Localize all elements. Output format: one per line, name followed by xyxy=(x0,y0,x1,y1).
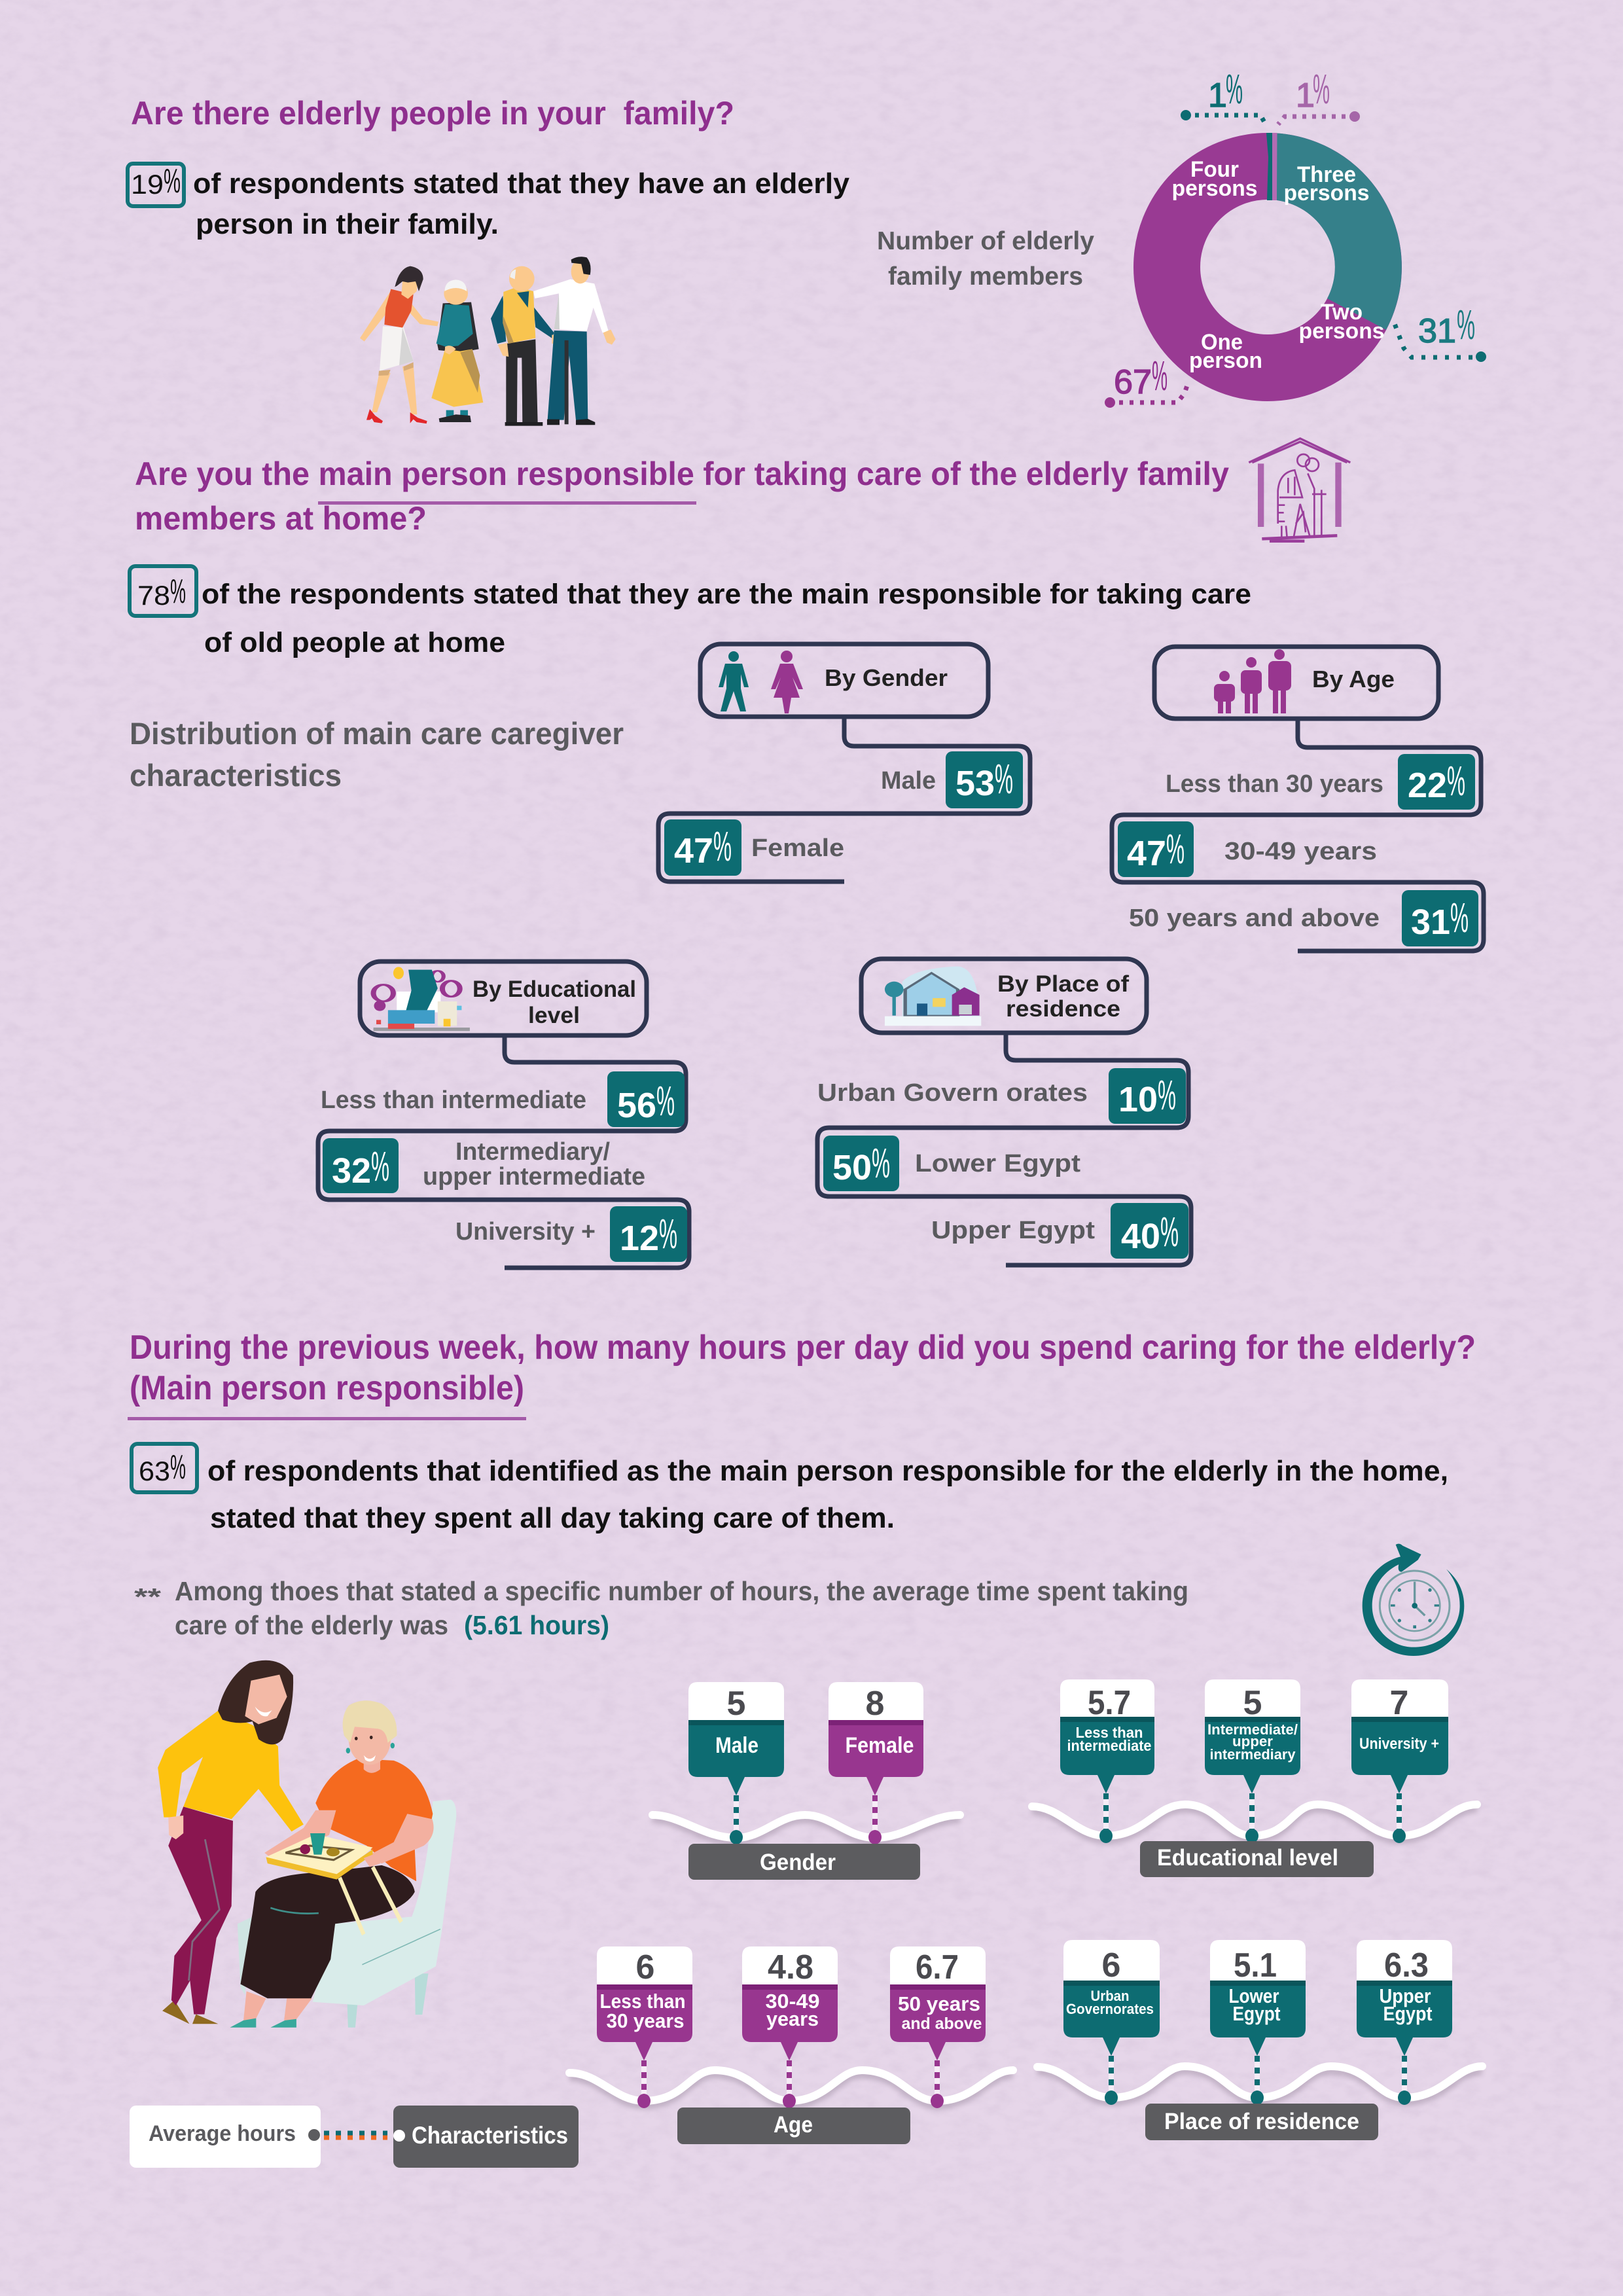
row: intermediary 32 percent: Intermediary/ xyxy=(455,1138,610,1166)
row: less than intermediate 56 percent: Less than intermediate xyxy=(321,1086,586,1114)
icon: education graphic xyxy=(374,967,470,1031)
stat: 63 percent badge: % xyxy=(170,1448,186,1486)
panel: by gender xyxy=(658,644,1030,882)
icon: male figure xyxy=(719,651,749,711)
card: intermediate 5: Intermediate/ xyxy=(1207,1721,1298,1738)
label: number of elderly family members xyxy=(877,227,1094,291)
row: male 53 percent xyxy=(881,751,1023,808)
wave line xyxy=(1032,1804,1477,1840)
connector: residence xyxy=(817,1033,1191,1265)
header box: by educational level: level xyxy=(528,1003,580,1028)
icon: female figure xyxy=(771,651,803,713)
card: less than intermediate 5.7 xyxy=(1060,1679,1154,1843)
heading: hours per day: During the previous week, how many hours per day did you spend caring for the elderly? xyxy=(130,1329,1476,1367)
card: urban governorates 6: Governorates xyxy=(1066,2001,1154,2017)
text block: 19 percent statement: person in their family. xyxy=(196,208,499,240)
card: upper egypt 6.3: Upper xyxy=(1380,1984,1431,2007)
illustration: caregiver serving elderly woman xyxy=(158,1660,456,2028)
card: less than intermediate 5.7: Less than xyxy=(1076,1724,1143,1741)
section: hours per day spent caring xyxy=(128,1329,1482,2168)
bar label: educational level xyxy=(1140,1841,1374,1877)
card: intermediate 5: upper xyxy=(1232,1733,1273,1749)
donut labels: person xyxy=(1189,348,1262,373)
row: female 47 percent xyxy=(664,819,844,876)
row: upper egypt 40 percent xyxy=(931,1203,1188,1259)
heading: hours per day xyxy=(128,1329,1476,1420)
label: number of elderly family members: family members xyxy=(888,262,1083,291)
text block: average time note: care of the elderly was xyxy=(175,1610,448,1640)
stat: 63 percent badge: 63 xyxy=(139,1456,170,1486)
card: less than 30 years 6 xyxy=(597,1946,692,2108)
row: university 12 percent xyxy=(455,1206,687,1262)
icon: elderly couple under a roof xyxy=(1249,439,1350,541)
legend: average hours xyxy=(130,2106,321,2168)
callout: 1 percent three persons xyxy=(1278,65,1360,124)
card: 30-49 years 4.8: 30-49 xyxy=(766,1990,819,2013)
card: 30-49 years 4.8: 4.8 xyxy=(768,1948,813,1986)
panel: by educational level xyxy=(318,961,689,1268)
row: less than intermediate 56 percent: % xyxy=(656,1077,675,1124)
bar label: place of residence xyxy=(1145,2104,1378,2140)
card: female 8: 8 xyxy=(866,1685,884,1723)
text block: distribution of main caregiver characteristics xyxy=(130,716,624,793)
card: intermediate 5: intermediary xyxy=(1209,1746,1296,1763)
donut labels: Two xyxy=(1321,300,1363,325)
bar label: age: Age xyxy=(774,2112,813,2138)
row: intermediary 32 percent xyxy=(323,1138,645,1193)
row: female 47 percent: Female xyxy=(751,834,844,862)
card: 50 years and above 6.7: and above xyxy=(902,2015,982,2033)
row: under 30 22 percent xyxy=(1166,754,1475,810)
text block: average time note: (5.61 hours) xyxy=(464,1610,609,1640)
connector: age xyxy=(1112,719,1484,951)
chart: gender average hours xyxy=(652,1682,960,1880)
header box: by place of residence: By Place of xyxy=(997,971,1129,997)
stat: 19 percent badge: % xyxy=(164,162,181,200)
bar label: educational level: Educational level xyxy=(1157,1845,1338,1871)
row: urban governorates 10 percent: 10 xyxy=(1118,1080,1158,1119)
callout: 1 percent four persons xyxy=(1181,65,1266,124)
row: university 12 percent: 12 xyxy=(620,1219,659,1258)
row: 50 and above 31 percent: 50 years and above xyxy=(1129,905,1380,932)
row: urban governorates 10 percent: % xyxy=(1158,1071,1176,1119)
panel: by place of residence xyxy=(817,959,1191,1265)
row: intermediary 32 percent: upper intermediate xyxy=(423,1163,645,1191)
stat: 78 percent badge: 78 xyxy=(137,580,170,611)
text block: 63 percent statement: of respondents that identified as the main person responsible for the elderly in the home, xyxy=(207,1455,1448,1487)
text block: 78 percent statement xyxy=(202,579,1251,658)
row: lower egypt 50 percent xyxy=(823,1136,1080,1191)
card: less than 30 years 6: 6 xyxy=(636,1948,654,1986)
legend: dotted link xyxy=(308,2129,387,2141)
icon: houses xyxy=(885,967,981,1026)
callout: 67 percent one person xyxy=(1105,352,1188,408)
card: lower egypt 5.1 xyxy=(1210,1940,1306,2105)
legend: characteristics xyxy=(393,2106,579,2168)
row: 50 and above 31 percent xyxy=(1129,890,1478,946)
row: 50 and above 31 percent: 31 xyxy=(1411,903,1450,942)
wave line xyxy=(652,1815,960,1842)
text block: distribution of main caregiver characteristics: characteristics xyxy=(130,758,342,793)
header box: by educational level: By Educational xyxy=(473,977,636,1002)
text block: 78 percent statement: of the respondents stated that they are the main responsible for taking care xyxy=(202,579,1251,610)
row: urban governorates 10 percent xyxy=(817,1068,1186,1124)
text block: 63 percent statement xyxy=(207,1455,1448,1534)
card: intermediate 5: 5 xyxy=(1243,1684,1262,1722)
wave line xyxy=(569,2070,1013,2106)
donut labels: Three xyxy=(1297,162,1356,187)
text block: 63 percent statement: stated that they spent all day taking care of them. xyxy=(210,1502,895,1534)
heading: main person responsible: members at home? xyxy=(135,500,427,537)
header box: by age xyxy=(1154,647,1438,719)
bar label: gender xyxy=(688,1844,920,1880)
illustration: family with elderly couple xyxy=(360,257,616,426)
card: male 5: Male xyxy=(715,1733,758,1758)
icon: clock with arrow xyxy=(1363,1544,1464,1656)
callout: 1 percent four persons: 1 xyxy=(1208,77,1227,115)
header box: by age: By Age xyxy=(1312,666,1395,692)
callout: 31 percent two persons xyxy=(1394,301,1486,362)
card: lower egypt 5.1: Egypt xyxy=(1233,2002,1280,2025)
donut labels xyxy=(1171,157,1385,373)
card: university 7: University + xyxy=(1359,1735,1439,1753)
card: male 5: 5 xyxy=(727,1685,745,1723)
callout: 1 percent three persons: 1 xyxy=(1296,77,1315,115)
header box: by place of residence xyxy=(861,959,1147,1033)
header box: by educational level xyxy=(360,961,647,1035)
stat: 78 percent badge: % xyxy=(170,573,186,611)
legend: characteristics: Characteristics xyxy=(412,2122,568,2149)
donut labels: Four xyxy=(1190,157,1239,182)
row: 30-49 47 percent xyxy=(1118,821,1377,877)
card: urban governorates 6: Urban xyxy=(1090,1988,1130,2004)
header box: by place of residence: residence xyxy=(1006,996,1120,1022)
callout: 31 percent two persons: 31 xyxy=(1418,312,1456,350)
panel: number of elderly family members xyxy=(877,65,1486,408)
row: lower egypt 50 percent: Lower Egypt xyxy=(915,1150,1080,1177)
card: 50 years and above 6.7: 6.7 xyxy=(916,1948,959,1986)
connector: education xyxy=(318,1035,689,1268)
row: intermediary 32 percent: 32 xyxy=(332,1151,371,1191)
connector: gender xyxy=(658,717,1030,882)
bar label: age xyxy=(677,2108,910,2144)
header box: by gender xyxy=(700,644,988,717)
card: female 8 xyxy=(829,1682,923,1844)
card: 50 years and above 6.7: 50 years xyxy=(898,1992,980,2015)
row: less than intermediate 56 percent: 56 xyxy=(617,1086,656,1125)
row: 50 and above 31 percent: % xyxy=(1450,894,1469,941)
row: under 30 22 percent: % xyxy=(1447,757,1465,804)
bar label: gender: Gender xyxy=(760,1850,836,1875)
text block: 78 percent statement: of old people at home xyxy=(204,627,505,658)
row: university 12 percent: % xyxy=(659,1210,677,1257)
row: female 47 percent: % xyxy=(713,823,732,870)
card: less than intermediate 5.7: 5.7 xyxy=(1088,1684,1131,1722)
card: 30-49 years 4.8: years xyxy=(766,2007,819,2030)
stat: 19 percent badge xyxy=(128,162,184,206)
card: 30-49 years 4.8 xyxy=(742,1946,838,2108)
card: urban governorates 6 xyxy=(1063,1940,1160,2105)
text block: average time note: Among thoes that stated a specific number of hours, the average time spent taking xyxy=(175,1576,1188,1606)
card: upper egypt 6.3 xyxy=(1357,1940,1452,2105)
stat: 63 percent badge xyxy=(132,1444,197,1492)
heading: hours per day: (Main person responsible) xyxy=(130,1369,524,1407)
row: male 53 percent: % xyxy=(995,755,1013,802)
chart: place of residence average hours xyxy=(1037,1940,1482,2140)
card: upper egypt 6.3: Egypt xyxy=(1383,2002,1432,2025)
text block: 19 percent statement: of respondents stated that they have an elderly xyxy=(193,168,850,200)
row: 30-49 47 percent: 47 xyxy=(1127,834,1166,873)
row: urban governorates 10 percent: Urban Govern orates xyxy=(817,1079,1088,1107)
row: upper egypt 40 percent: 40 xyxy=(1121,1217,1160,1256)
row: less than intermediate 56 percent xyxy=(321,1071,685,1127)
card: less than intermediate 5.7: intermediate xyxy=(1067,1737,1152,1754)
row: male 53 percent: 53 xyxy=(955,764,995,803)
text block: distribution of main caregiver characteristics: Distribution of main care caregiver xyxy=(130,716,624,751)
card: female 8: Female xyxy=(846,1733,914,1758)
row: under 30 22 percent: Less than 30 years xyxy=(1166,770,1383,798)
donut labels: persons xyxy=(1171,176,1258,201)
donut chart xyxy=(1167,133,1402,373)
row: upper egypt 40 percent: % xyxy=(1160,1208,1179,1255)
callout: 31 percent two persons: % xyxy=(1457,301,1475,348)
row: university 12 percent: University + xyxy=(455,1218,596,1246)
chart: educational level average hours xyxy=(1032,1679,1477,1877)
card: lower egypt 5.1: 5.1 xyxy=(1234,1946,1277,1984)
row: 30-49 47 percent: % xyxy=(1166,825,1185,872)
callout: 67 percent one person: % xyxy=(1152,352,1168,399)
label: number of elderly family members: Number of elderly xyxy=(877,227,1094,255)
section: main person responsible xyxy=(130,439,1484,1268)
text block: 19 percent statement xyxy=(193,168,850,240)
row: lower egypt 50 percent: 50 xyxy=(832,1148,872,1187)
row: female 47 percent: 47 xyxy=(674,831,713,870)
card: university 7 xyxy=(1351,1679,1448,1843)
card: less than 30 years 6: 30 years xyxy=(606,2009,685,2032)
stat: 78 percent badge xyxy=(130,566,196,616)
row: 30-49 47 percent: 30-49 years xyxy=(1224,838,1377,865)
card: less than 30 years 6: Less than xyxy=(599,1990,686,2013)
callout: 67 percent one person: 67 xyxy=(1114,363,1152,401)
row: male 53 percent: Male xyxy=(881,767,936,795)
panel: by age xyxy=(1112,647,1484,951)
card: urban governorates 6: 6 xyxy=(1102,1946,1120,1984)
heading: main person responsible xyxy=(135,456,1229,537)
wave line xyxy=(1037,2066,1482,2102)
row: upper egypt 40 percent: Upper Egypt xyxy=(931,1217,1095,1244)
section: elderly people in the family xyxy=(128,95,850,426)
card: university 7: 7 xyxy=(1390,1684,1408,1722)
icon: three age figures xyxy=(1214,649,1291,713)
card: lower egypt 5.1: Lower xyxy=(1229,1984,1279,2007)
row: under 30 22 percent: 22 xyxy=(1408,766,1447,805)
card: upper egypt 6.3: 6.3 xyxy=(1384,1946,1429,1984)
text block: average time note xyxy=(134,1576,1188,1640)
heading: are there elderly people: Are there elderly people in your family? xyxy=(131,95,734,132)
card: male 5 xyxy=(688,1682,784,1844)
donut labels: persons xyxy=(1284,181,1369,206)
card: 50 years and above 6.7 xyxy=(890,1946,986,2108)
header box: by gender: By Gender xyxy=(825,664,948,691)
donut labels: persons xyxy=(1298,319,1385,344)
stat: 19 percent badge: 19 xyxy=(131,169,164,200)
heading: main person responsible: Are you the main person responsible for taking care of the elderly family xyxy=(135,456,1229,492)
donut labels: One xyxy=(1201,330,1243,355)
callout: 1 percent three persons: % xyxy=(1313,65,1330,113)
card: intermediate 5 xyxy=(1205,1679,1300,1843)
chart: age average hours xyxy=(569,1946,1013,2144)
legend: average hours: Average hours xyxy=(149,2121,296,2146)
row: intermediary 32 percent: % xyxy=(371,1143,389,1190)
callout: 1 percent four persons: % xyxy=(1226,65,1243,113)
row: lower egypt 50 percent: % xyxy=(872,1139,890,1187)
bar label: place of residence: Place of residence xyxy=(1164,2109,1359,2134)
text block: average time note: ** xyxy=(134,1583,161,1610)
